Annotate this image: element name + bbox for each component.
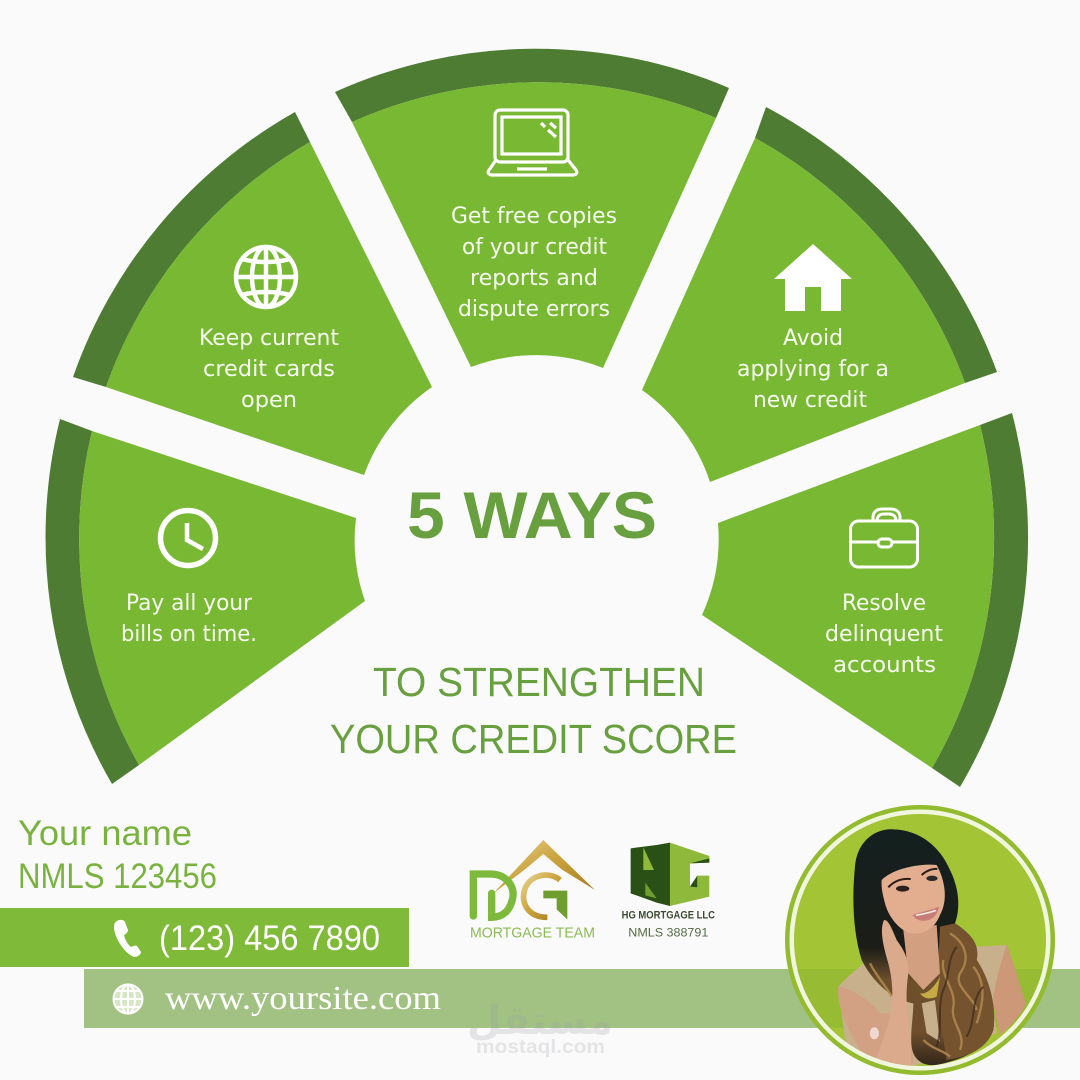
text: keep current credit cards open: Keep current (199, 326, 339, 351)
subheading: to strengthen your credit score: YOUR CREDIT SCORE (330, 716, 737, 762)
icon: phone (114, 920, 141, 957)
watermark: mostaql: mostaql.com (476, 1037, 605, 1058)
text: get free copies: reports and (470, 266, 598, 291)
text: resolve delinquent accounts (825, 591, 943, 678)
icon: laptop (488, 110, 577, 175)
icon: clock (160, 510, 216, 566)
text: phone number: (123) 456 7890 (159, 919, 380, 958)
segment: resolve delinquent accounts (702, 413, 1028, 787)
text: pay all your bills on time: bills on time. (121, 622, 257, 647)
text: get free copies: dispute errors (458, 297, 610, 322)
website bar (84, 969, 1080, 1028)
heading: 5 ways: 5 WAYS (407, 478, 657, 552)
logo: DG mortgage team: MORTGAGE TEAM (470, 925, 595, 941)
icon: website globe (114, 984, 142, 1014)
logo: HG mortgage: HG MORTGAGE LLC (622, 909, 715, 921)
logo: DG mortgage team (470, 840, 595, 941)
phone bar (0, 908, 409, 967)
logo: HG mortgage: NMLS 388791 (628, 926, 709, 940)
logo: HG mortgage (622, 843, 715, 940)
icon: globe (236, 247, 296, 307)
text: pay all your bills on time (121, 591, 257, 647)
segment: free credit reports (335, 49, 729, 368)
text: pay all your bills on time: Pay all your (126, 591, 253, 616)
text: get free copies (451, 204, 617, 322)
text: your name and license (18, 814, 217, 896)
text: website: www.yoursite.com (165, 980, 441, 1017)
text: get free copies: of your credit (462, 235, 607, 260)
text: resolve delinquent accounts: accounts (833, 653, 936, 678)
portrait: woman in circle (780, 805, 1060, 1075)
text: avoid applying for new credit: Avoid (783, 326, 843, 351)
text: avoid applying for new credit: new credit (753, 388, 867, 413)
segment: avoid applying (642, 107, 997, 482)
subheading: to strengthen your credit score: TO STRENGTHEN (373, 659, 705, 705)
text: resolve delinquent accounts: Resolve (842, 591, 926, 616)
text: your name and license: NMLS 123456 (18, 857, 217, 896)
icon: house (774, 244, 852, 311)
segment: pay all your bills (46, 419, 365, 784)
text: keep current credit cards open (199, 326, 339, 413)
segment: keep cards open (73, 112, 432, 475)
subheading: to strengthen your credit score (330, 659, 737, 762)
text: avoid applying for new credit: applying for a (737, 357, 889, 382)
text: resolve delinquent accounts: delinquent (825, 622, 943, 647)
icon: briefcase (850, 509, 918, 567)
watermark: mostaql: مستقل (467, 998, 613, 1044)
text: get free copies: Get free copies (451, 204, 617, 229)
text: keep current credit cards open: credit cards (203, 357, 335, 382)
text: your name and license: Your name (18, 814, 192, 853)
text: avoid applying for new credit (737, 326, 889, 413)
text: keep current credit cards open: open (241, 388, 297, 413)
